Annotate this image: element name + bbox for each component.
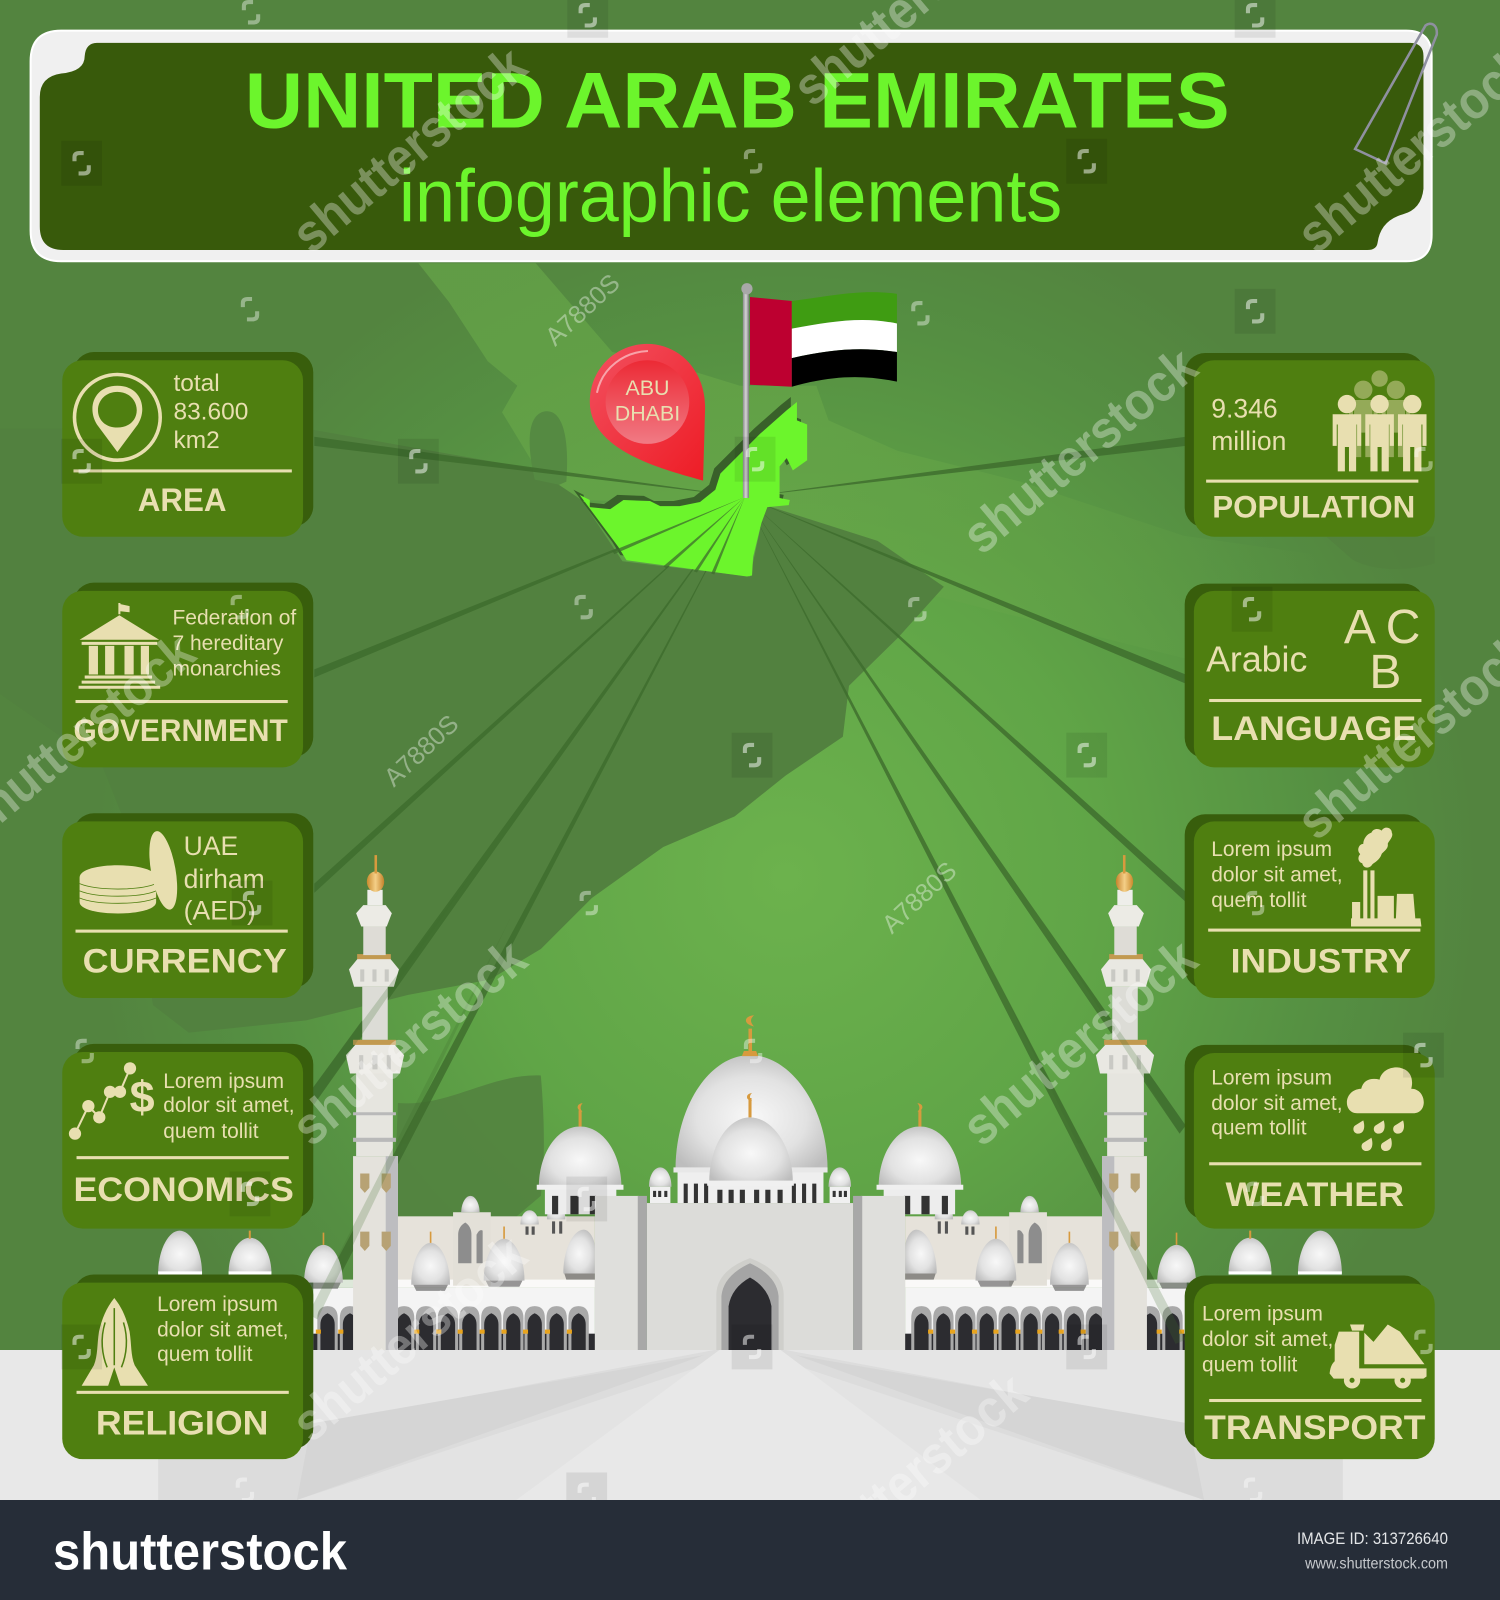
label: POPULATION	[1212, 488, 1415, 524]
map: light land strip	[418, 263, 1327, 694]
watermarks: A7880S	[379, 710, 464, 792]
panel: currency	[62, 813, 313, 998]
footer logo: shutterstock	[53, 1522, 347, 1581]
icon: praying hands	[82, 1298, 148, 1386]
panel: population	[1185, 353, 1435, 537]
panel: religion	[62, 1274, 313, 1459]
line: weather	[745, 497, 1186, 1134]
currency text: UAE	[184, 831, 238, 861]
icon: location pin	[74, 374, 160, 460]
icon: coins	[80, 829, 182, 914]
label: CURRENCY	[83, 942, 287, 980]
icon: growth chart	[69, 1062, 155, 1140]
description: Federation of	[172, 606, 296, 629]
label: ECONOMICS	[73, 1171, 294, 1209]
lines over map	[612, 497, 745, 574]
watermarks: A7880S	[540, 269, 626, 351]
website: www.shutterstock.com	[1304, 1555, 1448, 1572]
icon: letters: A	[1344, 601, 1376, 654]
line: industry	[745, 497, 1186, 902]
location pin: Abu Dhabi: ABU	[625, 376, 669, 400]
label: LANGUAGE	[1211, 710, 1416, 748]
map: right dark patch	[1327, 537, 1435, 569]
icon: dump truck	[1330, 1324, 1427, 1388]
mosque: main finial	[742, 1015, 758, 1056]
stats text: 83.600	[173, 398, 248, 425]
mosque: left half	[158, 855, 696, 1350]
line: economics	[306, 497, 745, 1104]
panel: language	[1185, 584, 1435, 767]
title banner	[31, 24, 1437, 261]
stats text: million	[1211, 426, 1286, 456]
description: Lorem ipsum	[1211, 1067, 1332, 1090]
watermarks: shutterstock	[951, 928, 1209, 1157]
description: quem tollit	[157, 1343, 253, 1366]
icon: people	[1333, 370, 1427, 471]
icon: growth chart: $	[130, 1071, 155, 1122]
stats text: total	[173, 370, 220, 397]
mosque: drum	[678, 1169, 823, 1203]
icon: letters: C	[1386, 601, 1420, 654]
panel: weather	[1185, 1045, 1435, 1229]
watermarks: shutterstock	[951, 336, 1209, 565]
icon: paperclip	[1355, 24, 1437, 163]
label: WEATHER	[1226, 1176, 1404, 1214]
description: quem tollit	[163, 1120, 259, 1143]
title: UNITED ARAB EMIRATES	[245, 57, 1230, 145]
mosque: central hall	[647, 1203, 853, 1350]
description: quem tollit	[1211, 889, 1307, 912]
description: 7 hereditary	[172, 632, 284, 655]
footer bar	[0, 1500, 1500, 1600]
line: religion	[308, 497, 745, 1319]
map: gulf finger	[530, 411, 567, 485]
watermarks: shutterstock	[281, 35, 538, 264]
mosque: right half	[804, 855, 1342, 1350]
currency text: dirham	[184, 864, 265, 894]
image id: IMAGE ID: 313726640	[1297, 1530, 1448, 1548]
icon: government building	[79, 603, 160, 689]
flag pole	[741, 283, 753, 498]
floor	[0, 1350, 1500, 1500]
panel: transport	[1185, 1276, 1435, 1459]
description: monarchies	[172, 658, 281, 681]
label: AREA	[138, 481, 227, 518]
line: area	[314, 437, 745, 497]
connector lines	[306, 437, 1186, 1344]
icon: rain cloud	[1347, 1067, 1424, 1151]
description: Lorem ipsum	[1202, 1302, 1323, 1325]
mosque: main door	[716, 1258, 784, 1350]
description: dolor sit amet,	[1211, 864, 1343, 887]
language text: Arabic	[1206, 639, 1307, 679]
currency text: (AED)	[184, 895, 256, 925]
watermarks: shutterstock	[782, 1362, 1039, 1591]
banner: sticker backing	[31, 31, 1432, 261]
map: lower dark patch	[393, 1075, 544, 1230]
mosque: front dome	[709, 1117, 793, 1183]
label: RELIGION	[96, 1405, 268, 1443]
panel: government	[62, 583, 313, 767]
panel: economics	[62, 1044, 313, 1229]
watermarks: shutterstock	[281, 1224, 538, 1453]
line: language	[745, 497, 1186, 684]
mosque: main dome	[676, 1055, 828, 1169]
description: Lorem ipsum	[163, 1070, 284, 1093]
location pin: Abu Dhabi: DHABI	[615, 401, 680, 425]
mosque	[158, 855, 1342, 1350]
panel: industry	[1185, 814, 1435, 998]
line: population	[745, 437, 1186, 497]
description: dolor sit amet,	[157, 1319, 288, 1342]
panel: area	[62, 352, 313, 537]
description: quem tollit	[1202, 1353, 1298, 1376]
description: Lorem ipsum	[1211, 838, 1332, 861]
location pin: Abu Dhabi	[590, 344, 705, 481]
description: dolor sit amet,	[163, 1094, 295, 1117]
subtitle: infographic elements	[399, 154, 1062, 237]
UAE map	[580, 402, 807, 577]
line: government	[314, 497, 745, 678]
stats text: km2	[173, 427, 220, 454]
icon: letters: B	[1369, 646, 1401, 699]
stats text: 9.346	[1211, 393, 1278, 423]
description: quem tollit	[1211, 1117, 1307, 1140]
description: dolor sit amet,	[1202, 1328, 1333, 1351]
label: INDUSTRY	[1231, 942, 1411, 980]
line: currency	[314, 497, 745, 893]
banner: panel	[40, 43, 1423, 250]
icon: factory	[1351, 828, 1421, 927]
UAE map shadow	[573, 397, 801, 571]
label: TRANSPORT	[1204, 1409, 1426, 1447]
description: dolor sit amet,	[1211, 1092, 1343, 1115]
label: GOVERNMENT	[73, 712, 288, 748]
map: dark region	[0, 429, 944, 1033]
watermarks: shutterstock	[281, 928, 538, 1157]
watermarks: A7880S	[877, 857, 962, 939]
UAE flag	[750, 292, 897, 387]
description: Lorem ipsum	[157, 1293, 278, 1316]
lines seen through minarets	[306, 878, 1186, 1344]
